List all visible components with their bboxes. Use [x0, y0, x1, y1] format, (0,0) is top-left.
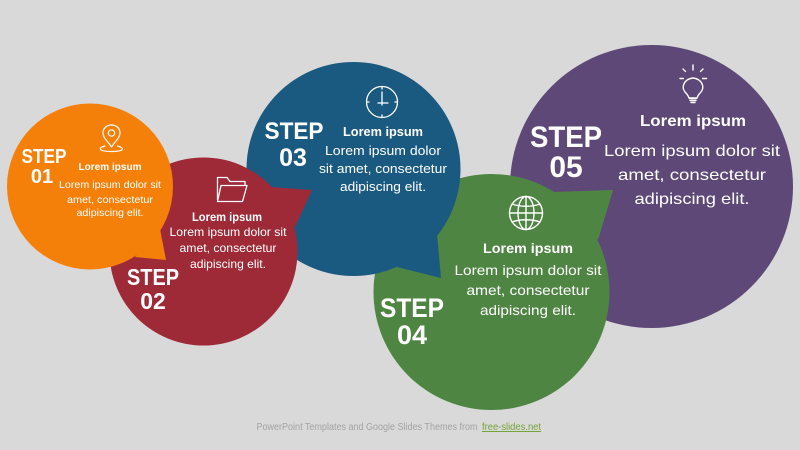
- heading: step 01: Lorem ipsum: [78, 161, 142, 173]
- text: step 01: [59, 179, 161, 219]
- panel: step 02: [110, 158, 312, 346]
- panel: step 03: [246, 62, 460, 278]
- label: step 03: 03: [279, 144, 307, 172]
- text: step 04: amet, consectetur: [466, 282, 590, 298]
- text: step 02: [170, 225, 287, 271]
- icon: globe: [510, 196, 542, 230]
- text: step 02: Lorem ipsum dolor sit: [170, 225, 287, 239]
- label: step 05: [530, 121, 602, 184]
- footer credit: free-slides.net: [482, 422, 541, 433]
- panel: step 01: [7, 104, 173, 270]
- bubble: step 04: [374, 174, 613, 410]
- bubble: step 05: [510, 45, 793, 328]
- label: step 02: STEP: [127, 264, 179, 290]
- label: step 05: STEP: [530, 121, 602, 154]
- text: step 05: Lorem ipsum dolor sit: [604, 143, 781, 160]
- footer credit: PowerPoint Templates and Google Slides Themes from: [256, 422, 478, 433]
- text: step 04: Lorem ipsum dolor sit: [454, 262, 602, 278]
- label: step 03: [264, 118, 324, 172]
- text: step 02: adipiscing elit.: [190, 257, 266, 271]
- bubble: step 02: [110, 158, 312, 346]
- icon: light bulb: [680, 65, 706, 102]
- label: step 05: 05: [549, 151, 583, 184]
- heading: step 04: Lorem ipsum: [483, 240, 573, 256]
- label: step 02: [127, 264, 179, 314]
- text: step 05: adipiscing elit.: [634, 191, 750, 208]
- text: step 03: sit amet, consectetur: [319, 161, 448, 176]
- text: step 03: Lorem ipsum dolor: [325, 143, 442, 158]
- text: step 04: [454, 262, 602, 318]
- label: step 01: STEP: [22, 146, 66, 168]
- label: step 03: STEP: [264, 118, 324, 145]
- text: step 05: [604, 143, 781, 208]
- text: step 01: adipiscing elit.: [76, 207, 144, 219]
- icon: folder: [218, 178, 247, 202]
- panel: step 05: [510, 45, 793, 328]
- text: step 05: amet, consectetur: [618, 167, 767, 184]
- bubble: step 03: [246, 62, 460, 278]
- label: step 04: STEP: [380, 293, 444, 323]
- label: step 04: 04: [397, 320, 427, 350]
- icon: map pin: [100, 125, 122, 152]
- label: step 02: 02: [140, 288, 166, 314]
- label: step 04: [380, 293, 444, 350]
- heading: step 02: Lorem ipsum: [192, 210, 262, 224]
- panel: step 04: [374, 174, 613, 410]
- text: step 03: adipiscing elit.: [340, 179, 426, 194]
- icon: clock: [366, 86, 398, 118]
- label: step 01: 01: [31, 166, 53, 188]
- text: step 01: amet, consectetur: [67, 194, 154, 206]
- bubble: step 01: [7, 104, 173, 270]
- heading: step 05: Lorem ipsum: [640, 113, 746, 130]
- label: step 01: [22, 146, 66, 188]
- text: step 03: [319, 143, 448, 194]
- text: step 02: amet, consectetur: [180, 241, 276, 255]
- text: step 04: adipiscing elit.: [480, 302, 576, 318]
- text: step 01: Lorem ipsum dolor sit: [59, 179, 161, 191]
- heading: step 03: Lorem ipsum: [343, 124, 423, 139]
